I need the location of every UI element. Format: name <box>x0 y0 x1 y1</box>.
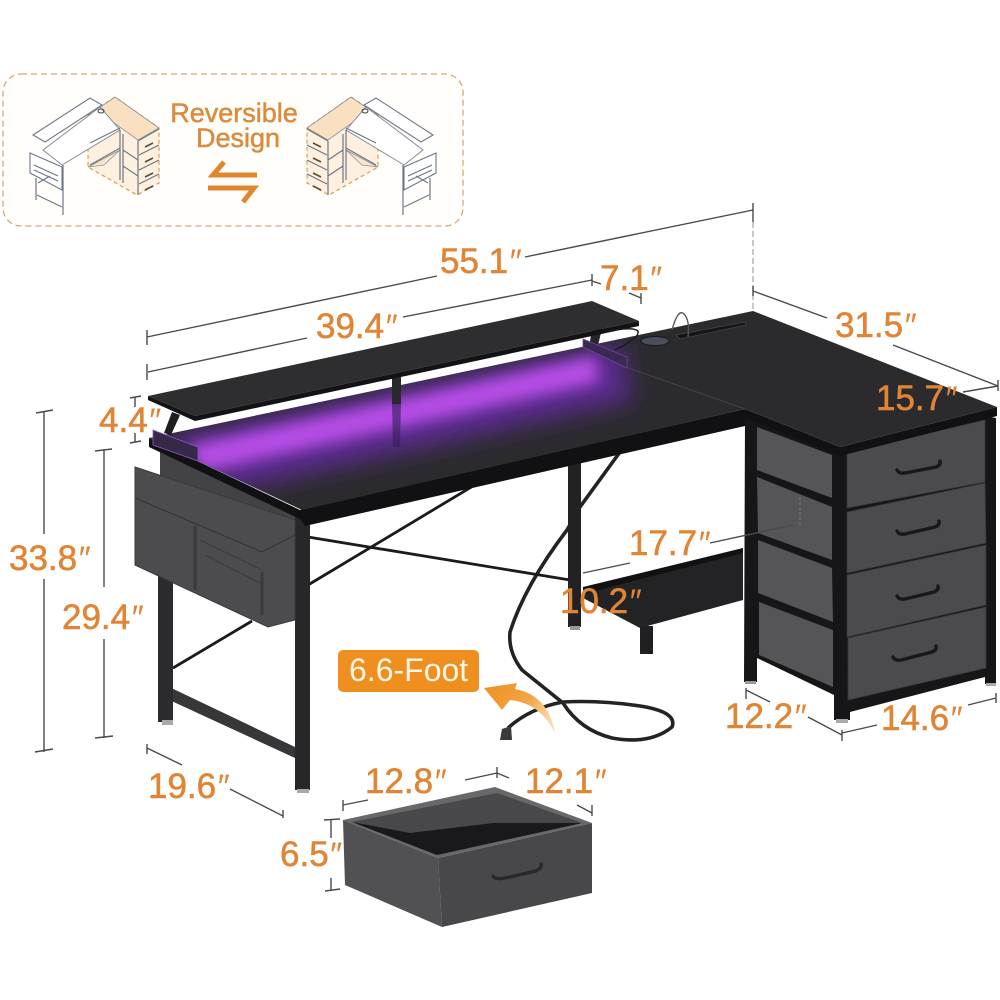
dimension: 6.5 <box>280 819 342 891</box>
power strip <box>676 322 746 339</box>
dimension: 14.6 <box>842 693 996 738</box>
desk legs and braces <box>158 462 581 793</box>
side fabric panels <box>757 427 833 687</box>
dimension: 33.8 <box>9 410 90 752</box>
dimension: 33.8: 33.8″ <box>9 539 90 578</box>
left support <box>164 412 180 435</box>
icon: desk with cabinet on right <box>30 97 159 215</box>
middle support <box>392 377 401 404</box>
dimension: 29.4: 29.4″ <box>62 598 143 637</box>
dimension: 17.7 <box>583 497 800 573</box>
dimension: 31.5 <box>753 286 998 391</box>
dimension: 15.7 <box>876 379 998 418</box>
dimension: 4.4: 4.4″ <box>99 401 161 440</box>
power plug <box>500 726 512 740</box>
desktop <box>149 311 997 526</box>
shelf top <box>148 301 639 416</box>
grommet <box>641 336 669 346</box>
drawer cabinet <box>744 416 996 723</box>
USB cable <box>605 329 638 350</box>
storage pocket <box>135 450 295 627</box>
drawer handles <box>893 461 940 660</box>
shelf edge <box>148 321 639 421</box>
dimension: 12.8 <box>343 762 497 811</box>
dimension: 29.4 <box>62 449 143 738</box>
dimension: 6.5: 6.5″ <box>280 835 342 874</box>
heading: reversible design: Reversible <box>170 98 298 128</box>
dimension: 19.6 <box>147 744 283 818</box>
dimension: 39.4: 39.4″ <box>316 307 397 346</box>
right bracket <box>583 339 627 368</box>
dimension: 10.2: 10.2″ <box>560 582 641 621</box>
bottom shelf <box>583 548 743 654</box>
riser shelf far support <box>589 322 603 350</box>
dimension: 12.8: 12.8″ <box>365 762 446 801</box>
dimension: 12.2: 12.2″ <box>725 697 806 736</box>
dimension: 12.2 <box>725 688 842 741</box>
panel: reversible design <box>3 74 463 226</box>
purple LED glow <box>165 342 632 492</box>
heading: reversible design: Design <box>196 123 280 153</box>
dimension: 15.7: 15.7″ <box>876 379 957 418</box>
dimension: 12.1: 12.1″ <box>525 762 606 801</box>
dimension: 12.1 <box>497 762 606 816</box>
icon: desk with cabinet on left <box>307 97 436 215</box>
icon: reverse arrows <box>208 162 257 202</box>
dimension: 17.7: 17.7″ <box>629 524 710 563</box>
desktop riser shelf <box>148 301 639 461</box>
charging cord <box>672 313 688 337</box>
dimension: 39.4 <box>147 274 592 380</box>
dimension: 55.1 <box>147 203 753 345</box>
dimension: 55.1: 55.1″ <box>440 242 521 281</box>
removable drawer <box>343 787 592 927</box>
dimension: 31.5: 31.5″ <box>835 306 916 345</box>
dimension: 7.1: 7.1″ <box>600 259 662 298</box>
arrow: cable to badge <box>484 683 555 733</box>
dimension: 14.6: 14.6″ <box>881 699 962 738</box>
front drawers <box>847 420 986 700</box>
badge: 6.6-foot: 6.6-Foot <box>349 652 468 688</box>
left bracket <box>153 430 198 461</box>
cabinet frame <box>744 416 996 720</box>
power cable <box>508 452 673 740</box>
drawer handle <box>493 864 541 879</box>
dimension: 19.6: 19.6″ <box>148 767 229 806</box>
